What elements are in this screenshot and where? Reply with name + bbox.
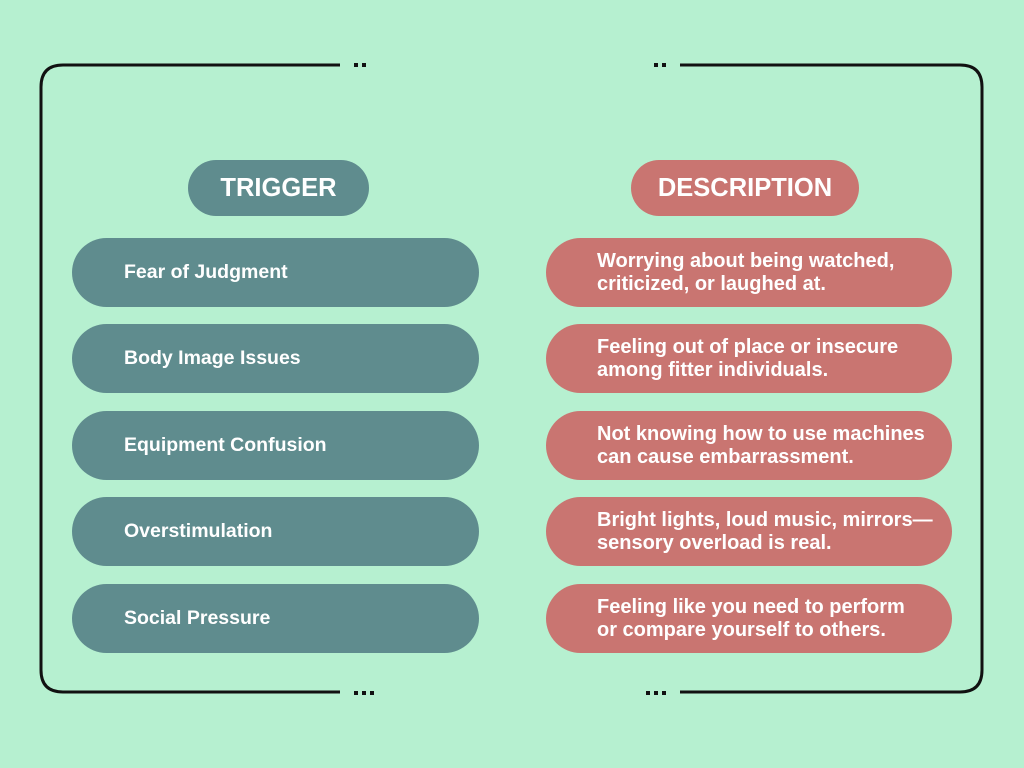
description: body image bbox=[546, 324, 952, 393]
description: fear of judgment bbox=[546, 238, 952, 307]
description: equipment bbox=[546, 411, 952, 480]
description: fear of judgment: criticized, or laughed at. bbox=[597, 272, 826, 294]
trigger: fear of judgment: Fear of Judgment bbox=[124, 261, 288, 283]
heading: trigger bbox=[188, 160, 369, 216]
description: body image: among fitter individuals. bbox=[597, 358, 828, 380]
description: body image: Feeling out of place or insecure bbox=[597, 336, 898, 358]
trigger: fear of judgment bbox=[72, 238, 479, 307]
trigger: overstimulation: Overstimulation bbox=[124, 520, 272, 542]
description: social pressure bbox=[546, 584, 952, 653]
description: fear of judgment: Worrying about being watched, bbox=[597, 250, 894, 272]
heading: description: DESCRIPTION bbox=[658, 174, 832, 202]
description: equipment: can cause embarrassment. bbox=[597, 446, 854, 468]
description: overstimulation: Bright lights, loud music, mirrors— bbox=[597, 508, 933, 530]
trigger: overstimulation bbox=[72, 497, 479, 566]
heading: trigger: TRIGGER bbox=[220, 174, 337, 202]
description: equipment: Not knowing how to use machines bbox=[597, 422, 925, 444]
heading: description bbox=[631, 160, 859, 216]
trigger: social pressure: Social Pressure bbox=[124, 607, 270, 629]
trigger: equipment bbox=[72, 411, 479, 480]
description: overstimulation: sensory overload is real. bbox=[597, 532, 832, 554]
trigger: body image bbox=[72, 324, 479, 393]
trigger: social pressure bbox=[72, 584, 479, 653]
description: social pressure: Feeling like you need to perform bbox=[597, 596, 905, 618]
description: social pressure: or compare yourself to others. bbox=[597, 618, 886, 640]
trigger: body image: Body Image Issues bbox=[124, 347, 301, 369]
description: overstimulation bbox=[546, 497, 952, 566]
trigger: equipment: Equipment Confusion bbox=[124, 434, 327, 456]
